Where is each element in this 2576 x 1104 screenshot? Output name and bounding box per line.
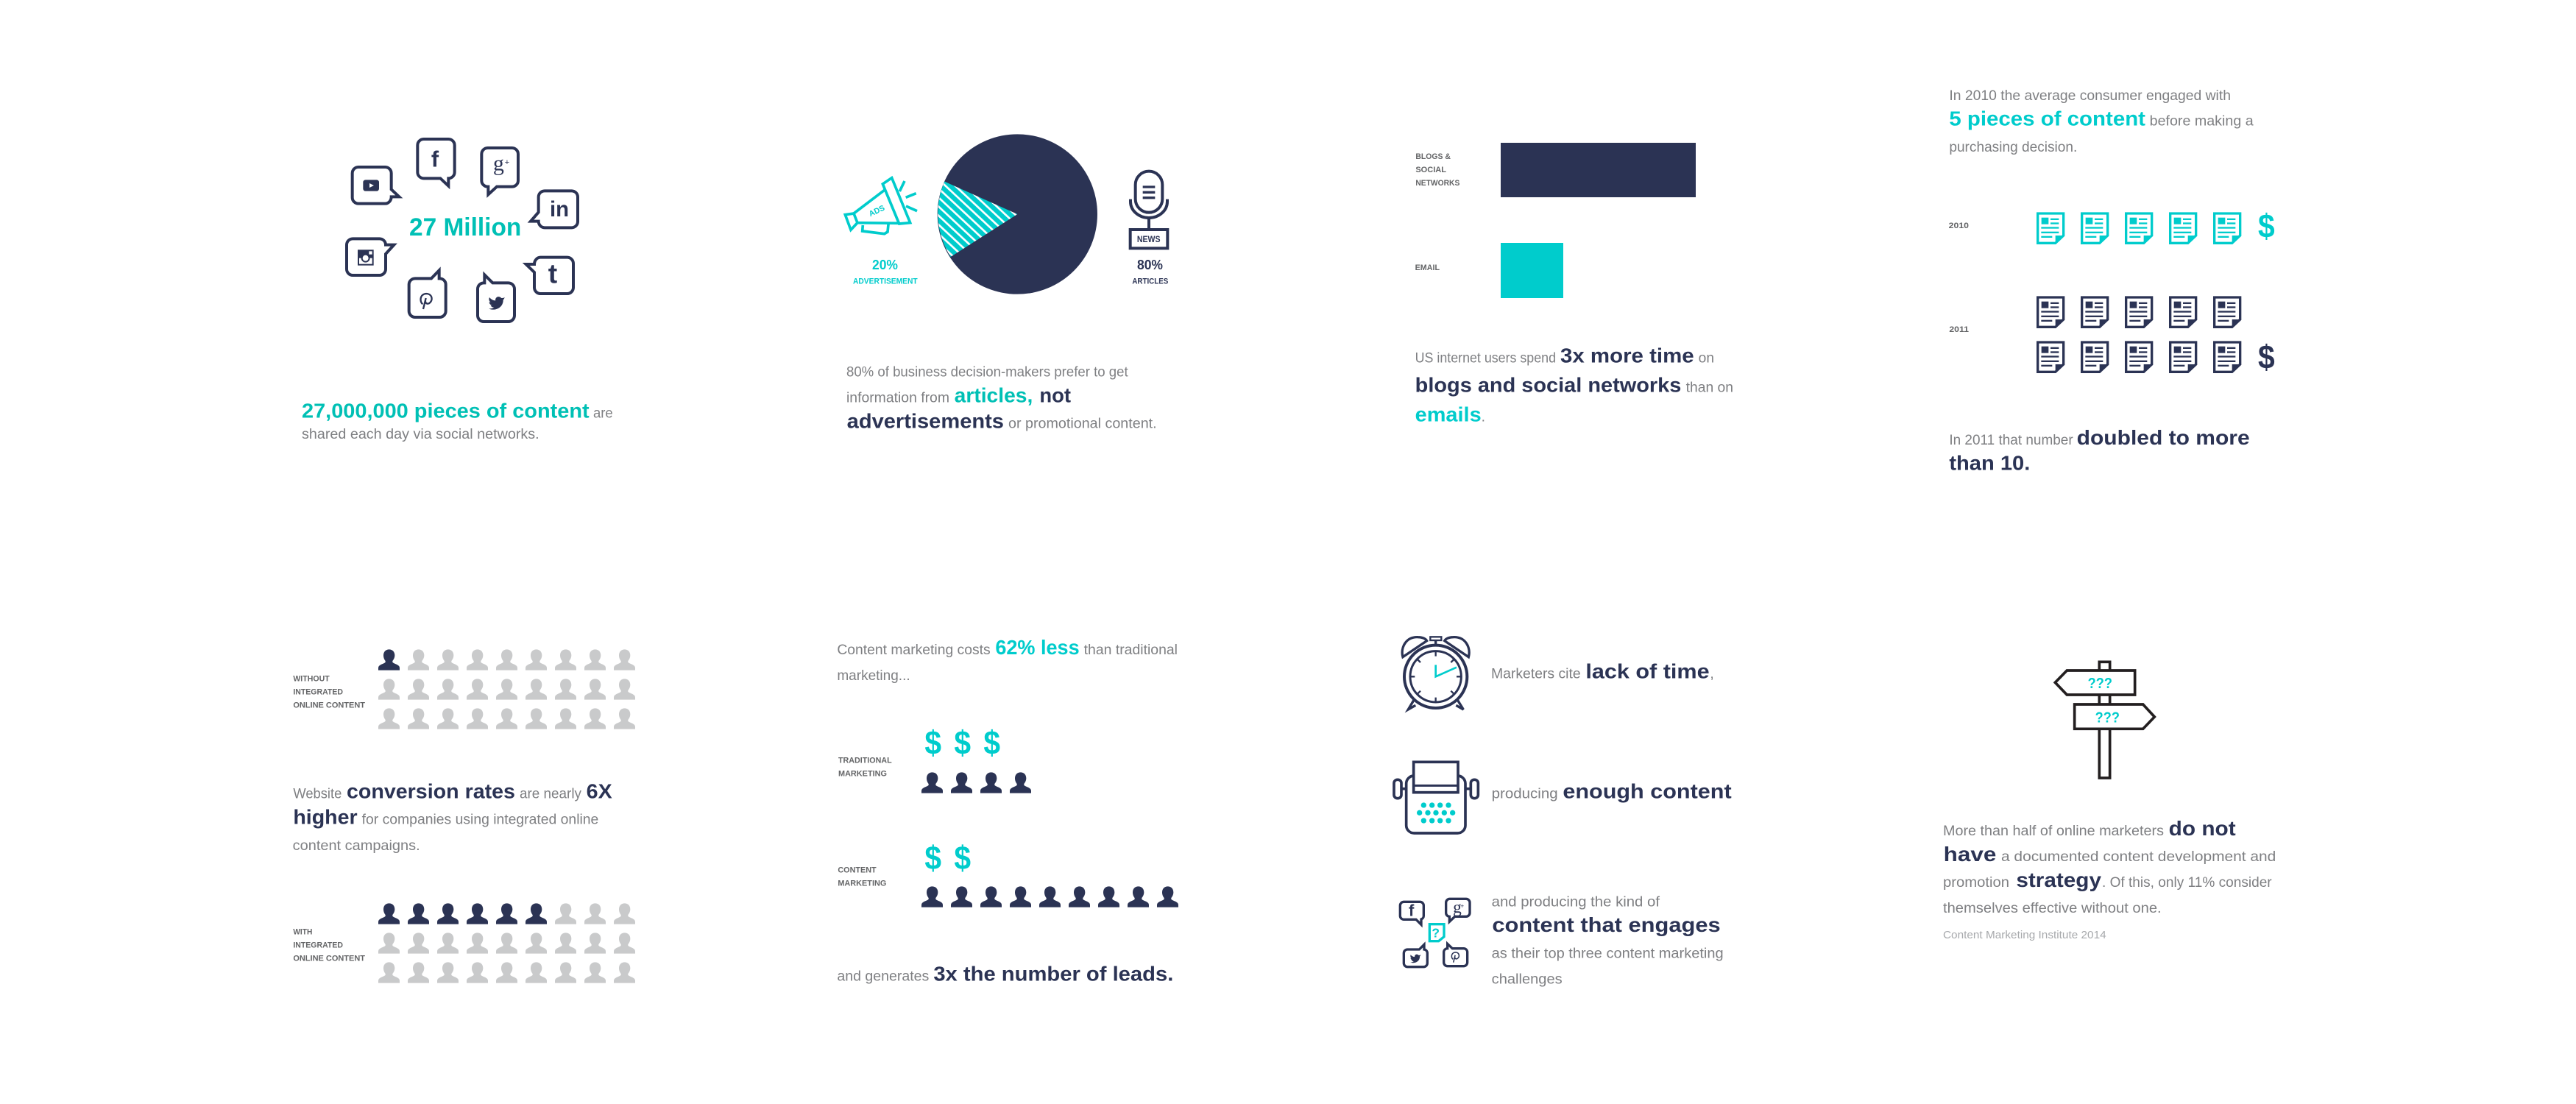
icon: tumblr bubble [526, 258, 573, 294]
icons: people grid with content [378, 903, 635, 983]
text block: 2011 statement: than 10. [1949, 451, 2030, 474]
bar: email [1501, 243, 1563, 298]
icon: pinterest bubble [409, 270, 446, 317]
label: without integrated online content: ONLINE CONTENT [293, 701, 365, 710]
text block: enough content: producing [1492, 786, 1558, 802]
label: 20% advertisement: 20% [872, 257, 898, 272]
label: without integrated online content: INTEGRATED [293, 688, 343, 697]
panel: articles versus advertisements [845, 134, 1168, 433]
icons: 2011 content pieces: $ [2258, 338, 2275, 375]
icons: content marketing dollars: $ [924, 839, 941, 877]
icons: people grid without content [378, 649, 635, 729]
text block: 2011 statement: doubled to more [2077, 426, 2250, 449]
icon: social bubbles around question mark: ? [1432, 925, 1440, 940]
icons: traditional leads [921, 772, 1031, 793]
text block: 2010 statement: 5 pieces of content [1949, 107, 2145, 130]
panel: time spent on blogs versus email [1415, 143, 1733, 426]
icon: facebook bubble [417, 139, 455, 186]
text block: strategy statement: More than half of online marketers [1943, 824, 2164, 839]
text block: lack of time [1491, 660, 1714, 683]
label: content marketing: CONTENT [838, 866, 877, 875]
text block: conversion statement: higher [293, 805, 358, 828]
label: 20% advertisement: ADVERTISEMENT [853, 277, 918, 286]
label: content marketing [838, 866, 886, 888]
text block: 3x leads [837, 963, 1173, 986]
text block: conversion statement: for companies using integrated online [362, 812, 598, 827]
text block: content that engages: as their top three content marketing [1492, 946, 1724, 962]
text block: 3x more time [1415, 344, 1733, 426]
panel: marketer challenges [1394, 637, 1732, 988]
text block: decision-makers statement: information from [846, 391, 949, 406]
bar chart: time spent [1415, 143, 1696, 298]
text block: 3x more time: on [1699, 351, 1714, 367]
icon: google plus bubble: g [493, 152, 504, 176]
text block: strategy statement: do not [2169, 817, 2236, 840]
label: blogs and social networks: BLOGS & [1415, 152, 1451, 161]
label: 80% articles: 80% [1137, 257, 1163, 272]
icon: twitter bubble [478, 275, 514, 322]
panel: 27 million pieces of content [302, 139, 613, 442]
text block: 3x leads: 3x the number of leads. [933, 963, 1173, 986]
icons: 2010 content pieces [2038, 208, 2275, 245]
text block: 3x more time: blogs and social networks [1415, 374, 1681, 397]
icon: signpost: ??? [2095, 710, 2120, 726]
text block: conversion statement: 6X [587, 779, 612, 802]
icon: social bubbles around question mark [1400, 898, 1470, 967]
text block: enough content [1492, 779, 1732, 802]
text block: 62% less: than traditional [1084, 643, 1178, 658]
text block: 3x more time: US internet users spend [1415, 351, 1556, 367]
text block: shared content statement [302, 400, 613, 442]
label: with integrated online content [293, 928, 365, 963]
icons: traditional dollars [924, 723, 1000, 761]
label: email: EMAIL [1415, 263, 1440, 272]
text block: decision-makers statement: 80% of business decision-makers prefer to get [846, 365, 1128, 381]
text block: 2011 statement [1949, 426, 2250, 474]
text block: 62% less: 62% less [995, 636, 1080, 659]
label: traditional marketing: TRADITIONAL [838, 757, 892, 765]
text block: enough content: enough content [1563, 779, 1732, 802]
text block: 2010 statement: purchasing decision. [1949, 140, 2077, 155]
text block: decision-makers statement [846, 365, 1157, 433]
text block: 62% less: Content marketing costs [837, 643, 991, 658]
label: without integrated online content: WITHOUT [293, 675, 330, 684]
text block: shared content statement: are [593, 406, 613, 422]
icon: alarm clock [1402, 637, 1469, 710]
label: 2010: 2010 [1949, 222, 1969, 230]
label: content marketing: MARKETING [838, 880, 886, 888]
icon: linkedin bubble [531, 191, 578, 227]
text block: lack of time: lack of time [1585, 660, 1710, 683]
text block: 2010 statement [1949, 88, 2254, 155]
text block: 2010 statement: In 2010 the average consumer engaged with [1949, 88, 2231, 104]
icon: news microphone: NEWS [1137, 234, 1160, 244]
text block: decision-makers statement: advertisements [847, 410, 1004, 433]
pie chart: 80 / 20 split [938, 134, 1097, 294]
text block: conversion statement: conversion rates [347, 779, 515, 802]
label: 80% articles: ARTICLES [1132, 277, 1168, 286]
label: 2011: 2011 [1949, 325, 1969, 334]
text block: conversion statement: content campaigns. [293, 838, 420, 854]
panel: content marketing cost [837, 636, 1178, 986]
icons: 2010 content pieces: $ [2258, 208, 2275, 245]
panel: pieces of content before purchase [1949, 88, 2275, 474]
icon: google plus bubble [481, 148, 518, 194]
text block: content that engages [1492, 895, 1724, 988]
text block: 3x more time: than on [1686, 381, 1733, 396]
text block: strategy statement [1943, 817, 2276, 916]
label: blogs and social networks [1415, 152, 1459, 188]
text block: strategy statement: . Of this, only 11% consider [2102, 875, 2272, 891]
text block: 3x more time: 3x more time [1560, 344, 1694, 367]
text block: strategy statement: promotion [1943, 875, 2009, 891]
text block: content that engages: and producing the kind of [1492, 895, 1660, 910]
icons: 2011 content pieces [2038, 297, 2275, 375]
text block: 3x more time: emails [1415, 403, 1482, 426]
text block: strategy statement: have [1944, 843, 1996, 866]
icons: content marketing dollars [924, 839, 971, 877]
label: 20% advertisement [853, 257, 918, 286]
text block: lack of time: , [1710, 667, 1714, 682]
heading: 27 Million: 27 Million [409, 213, 521, 241]
text block: conversion statement: are nearly [520, 786, 581, 802]
icon: social bubbles around question mark: g [1453, 898, 1462, 917]
icon: megaphone: ADS [868, 204, 886, 219]
text block: strategy statement: a documented content development and [2001, 849, 2276, 865]
icon: social bubbles around question mark: f [1409, 902, 1415, 920]
icon: instagram bubble [347, 238, 394, 275]
panel: no content strategy [1943, 662, 2276, 941]
text block: 62% less [837, 636, 1178, 684]
icon: signpost [2055, 662, 2154, 778]
text block: content that engages: challenges [1492, 972, 1563, 988]
panel: conversion rates [293, 649, 635, 983]
icon: megaphone [845, 178, 917, 234]
icons: content marketing dollars: $ [954, 839, 971, 877]
text block: decision-makers statement: or promotional content. [1008, 417, 1157, 432]
text block: strategy statement: strategy [2016, 868, 2101, 891]
icon: tumblr bubble: t [548, 258, 557, 289]
text block: 3x leads: and generates [837, 969, 929, 985]
label: 80% articles [1132, 257, 1168, 286]
text block: strategy statement: themselves effective without one. [1943, 901, 2162, 916]
text block: 2011 statement: In 2011 that number [1949, 433, 2073, 448]
label: with integrated online content: WITH [293, 928, 312, 937]
icons: traditional dollars: $ [983, 723, 1000, 761]
label: with integrated online content: INTEGRATED [293, 941, 343, 950]
bar: blogs and social networks [1501, 143, 1696, 197]
icon: linkedin bubble: in [550, 197, 569, 222]
icon: facebook bubble: f [431, 147, 439, 172]
label: without integrated online content [293, 675, 365, 710]
icon: typewriter [1394, 762, 1478, 833]
source note: Content Marketing Institute 2014 [1943, 930, 2106, 941]
icon: youtube bubble [353, 167, 399, 204]
label: blogs and social networks: SOCIAL [1415, 166, 1446, 174]
label: blogs and social networks: NETWORKS [1415, 179, 1459, 188]
label: with integrated online content: ONLINE CONTENT [293, 955, 365, 963]
icon: signpost: ??? [2088, 675, 2112, 692]
icon: social bubbles around question mark: + [1460, 902, 1464, 909]
text block: 62% less: marketing... [837, 668, 910, 684]
icon: google plus bubble: + [505, 158, 510, 167]
text block: shared content statement: shared each day via social networks. [302, 427, 539, 442]
icons: content marketing leads [921, 886, 1178, 907]
text block: decision-makers statement: articles, [955, 384, 1033, 407]
icons: traditional dollars: $ [954, 723, 971, 761]
icon: social network speech bubbles [347, 139, 578, 322]
label: traditional marketing: MARKETING [838, 770, 887, 779]
text block: 2010 statement: before making a [2150, 114, 2254, 130]
icon: news microphone [1130, 171, 1167, 248]
text block: content that engages: content that engages [1492, 913, 1721, 936]
text block: conversion statement: Website [293, 786, 342, 802]
text block: lack of time: Marketers cite [1491, 667, 1581, 682]
icons: traditional dollars: $ [924, 723, 941, 761]
text block: 3x more time: . [1482, 410, 1485, 425]
text block: conversion statement [293, 779, 612, 854]
text block: shared content statement: 27,000,000 pieces of content [302, 400, 590, 422]
label: traditional marketing [838, 757, 892, 779]
text block: decision-makers statement: not [1039, 384, 1071, 407]
